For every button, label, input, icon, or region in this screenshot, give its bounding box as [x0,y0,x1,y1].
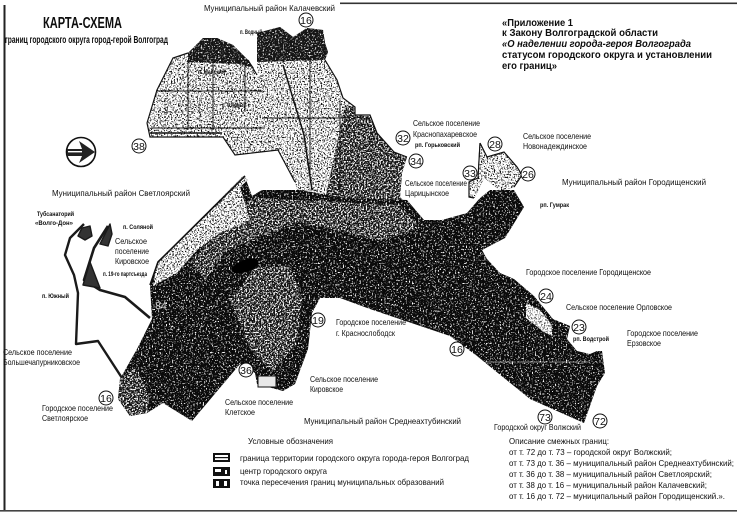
marker 19: 19 [312,315,324,327]
map place labels: поселение [115,246,149,256]
map place labels: Сельское поселение [413,118,480,128]
adjacent boundaries description: от т. 36 до т. 38 – муниципальный район Светлоярский; [509,469,712,479]
map place labels: Новонадеждинское [523,141,587,151]
marker 16 south-west: 16 [100,393,112,405]
map region: western wedge [153,176,250,286]
adjacent boundaries description: от т. 72 до т. 73 – городской округ Волжский; [509,447,672,457]
map place labels: п. Водный [240,28,262,36]
marker 26: 26 [522,169,534,181]
marker 38: 38 [133,141,145,153]
map: grid roads of northern district [150,60,350,190]
marker 16 south: 16 [451,344,463,356]
map place labels: «Волго-Дон» [35,220,73,227]
map place labels: Клетское [225,407,255,417]
map place labels: п. Соляной [123,223,153,231]
marker 36: 36 [240,365,252,377]
map place labels: рп. Горьковский [415,141,460,149]
map: territory of Volgograd urban district [65,27,605,423]
map: northern district outline [147,53,407,182]
map region: north-east mixed district [325,105,407,205]
legend [213,436,469,488]
map place labels: Городской округ Волжский [494,422,581,432]
map place labels: Городское поселение [627,328,698,338]
marker 84: 84 [155,300,167,312]
map place labels: Муниципальный район Среднеахтубинский [304,416,461,426]
map place labels: Царицынское [405,188,449,198]
marker 16 north: 16 [300,15,312,27]
map place labels: п. Майский [198,68,225,76]
marker 23: 23 [573,322,585,334]
adjacent boundaries description [509,436,734,501]
map region: northern dark caps [188,27,328,68]
map place labels: Ерзовское [627,338,661,348]
map: enclave boundary lines south-west [65,224,150,378]
map place labels: Муниципальный район Светлоярский [52,188,190,198]
legend heading: Условные обозначения [248,436,333,446]
map place labels [3,3,706,432]
map region: white patch near Orlovskoye [526,303,552,336]
map place labels: Муниципальный район Калачевский [204,3,335,13]
marker 73: 73 [539,412,551,424]
map place labels: Большечапурниковское [3,357,80,367]
map region: south-western sector [118,367,150,416]
marker 24: 24 [540,291,552,303]
map: western wedge outline [150,176,245,285]
north arrow icon [66,138,96,166]
map place labels: Сельское поселение Орловское [566,302,672,312]
map place labels: Муниципальный район Городищенский [562,177,706,187]
adjacent boundaries description: от т. 38 до т. 16 – муниципальный район Калачевский; [509,480,707,490]
map place labels: Кировское [310,384,343,394]
map place labels: г. Краснослободск [336,328,395,338]
map place labels: Кировское [115,256,149,266]
title block [5,15,168,46]
appendix heading text block: к Закону Волгоградской области [502,27,658,39]
marker 28: 28 [489,139,501,151]
map place labels: Сельское поселение [310,374,378,384]
map place labels: Сельское [115,236,147,246]
adjacent boundaries description: от т. 16 до т. 72 – муниципальный район Городищенский.». [509,491,725,501]
title: КАРТА-СХЕМА [43,15,122,32]
map place labels: Городское поселение [42,403,113,413]
map place labels: Городское поселение Городищенское [526,267,651,277]
map place labels: Сельское поселение [225,397,293,407]
appendix heading text block: его границ» [502,60,557,72]
map place labels: Краснопахаревское [413,129,477,139]
map place labels: Сельское поселение [405,178,467,188]
map region: main dark river band [118,177,605,423]
map place labels: п. Южный [42,292,69,300]
map region: upper band mottled zone [190,198,420,280]
marker 32: 32 [397,133,409,145]
map place labels: Сельское поселение [523,131,591,141]
map place labels: рп. Водстрой [573,335,609,343]
legend item: boundary: граница территории городского округа города-героя Волгоград [240,453,469,463]
subtitle: границ городского округа город-герой Волгоград [5,34,168,46]
map place labels: Тубсанаторий [37,210,74,218]
map region: northern light district [147,27,407,205]
appendix heading text block: «О наделении города-героя Волгограда [502,38,691,50]
map region: central loop lighter district [230,265,302,372]
map: white streak marks on dark band [170,224,590,362]
map place labels: Светлоярское [42,413,88,423]
adjacent boundaries description: Описание смежных границ: [509,436,609,446]
map place labels: п. 19-го партсъезда [103,271,147,278]
marker 34: 34 [410,156,422,168]
map place labels: п. Озёрный [222,101,246,109]
legend item: district centre: центр городского округа [240,466,327,476]
map place labels: Сельское поселение [3,347,72,357]
boundary point markers [99,13,607,428]
map place labels: Городское поселение [336,317,406,327]
map: darkest spot at city centre [230,256,260,276]
legend item: intersection point: точка пересечения границ муниципальных образований [240,477,444,487]
appendix heading text block [502,17,712,72]
appendix heading text block: статусом городского округа и установлении [502,49,712,61]
map: Novonadezhdinsk lobe outline [469,143,522,198]
map region: small white block on south lobe [258,376,276,387]
marker 33: 33 [464,168,476,180]
appendix heading text block: «Приложение 1 [502,17,573,29]
marker 72: 72 [594,416,606,428]
map region: Novonadezhdinsk lobe [469,143,522,198]
map place labels: рп. Гумрак [540,202,570,209]
